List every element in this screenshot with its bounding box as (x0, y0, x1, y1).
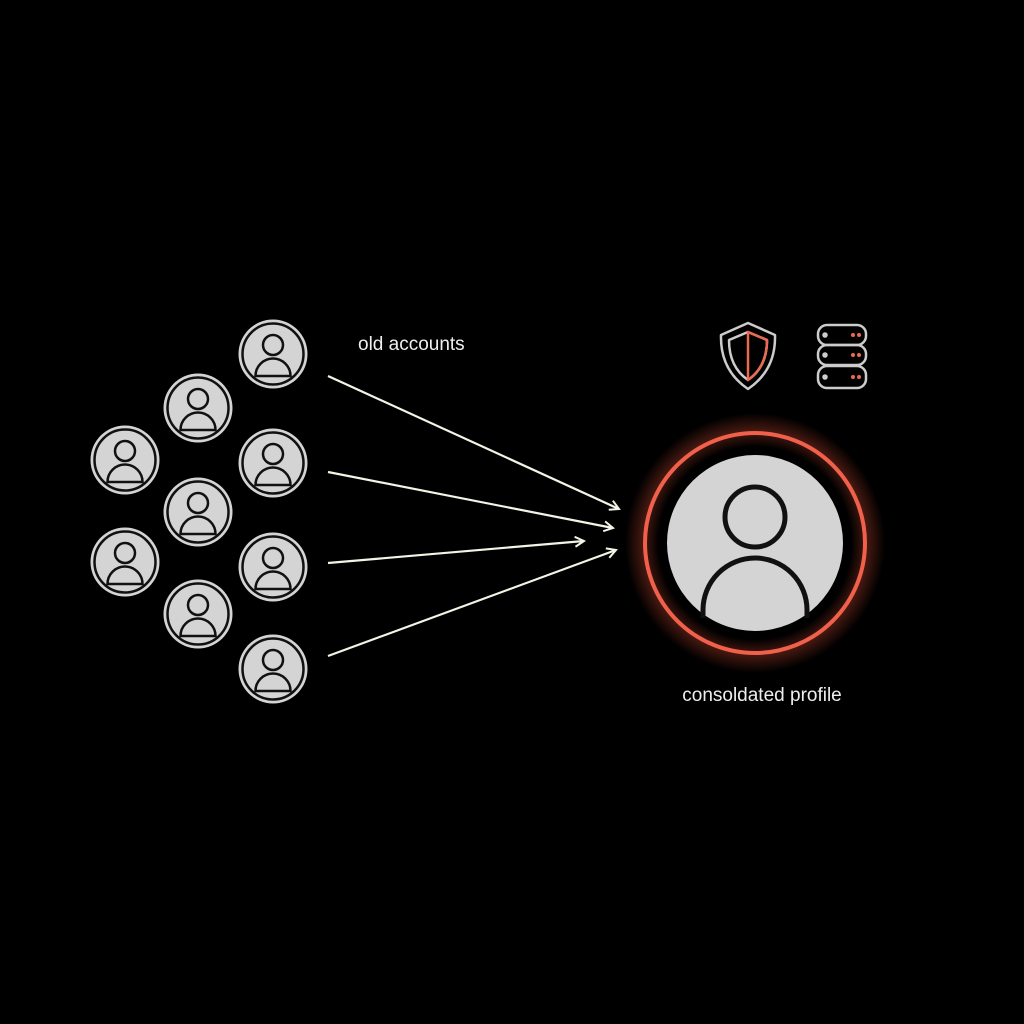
arrows converging (328, 376, 619, 656)
consolidated profile avatar (625, 413, 885, 673)
label: old accounts: old accounts (358, 334, 465, 355)
icon: database (818, 325, 866, 388)
label: consolidated profile: consoldated profile (682, 685, 842, 706)
icon: shield (721, 323, 775, 389)
old account avatars (90, 320, 308, 704)
